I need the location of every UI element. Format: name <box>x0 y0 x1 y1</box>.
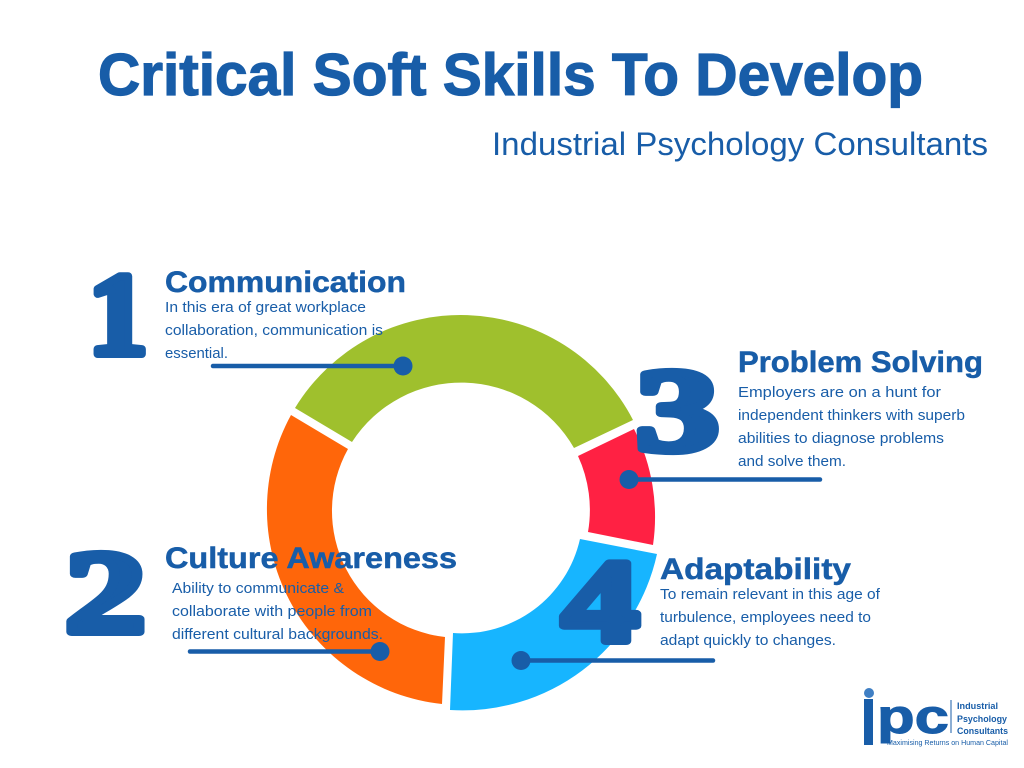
block: communication <box>165 266 406 362</box>
body: culture awareness: collaborate with people from <box>172 604 372 620</box>
pointer: adaptability <box>512 651 713 670</box>
numeral 2: 2 <box>65 527 146 658</box>
body: adaptability <box>660 587 881 649</box>
body: problem solving <box>738 385 965 470</box>
body: problem solving: independent thinkers with superb <box>738 408 965 424</box>
block: adaptability <box>660 553 881 649</box>
subtitle: Industrial Psychology Consultants <box>492 126 988 162</box>
logo name: Psychology <box>957 714 1008 725</box>
logo divider <box>950 700 952 733</box>
logo name: Consultants <box>957 726 1008 737</box>
heading: communication: Communication <box>165 266 406 299</box>
numeral 1: 1 <box>88 249 148 380</box>
segment: blue adaptability <box>450 539 657 710</box>
body: problem solving: and solve them. <box>738 454 846 470</box>
logo stem <box>864 699 873 745</box>
heading: culture awareness: Culture Awareness <box>165 542 457 575</box>
body: problem solving: Employers are on a hunt for <box>738 385 941 401</box>
logo name <box>957 701 1008 737</box>
body: adaptability: turbulence, employees need to <box>660 610 871 626</box>
segment: green communication <box>295 315 633 448</box>
logo: ipc <box>864 688 1008 747</box>
logo tagline: Maximising Returns on Human Capital <box>887 738 1008 747</box>
heading: adaptability: Adaptability <box>660 553 851 586</box>
body: communication: collaboration, communication is <box>165 323 383 339</box>
numeral 3: 3 <box>636 345 719 476</box>
body: culture awareness: Ability to communicate & <box>172 581 344 597</box>
pointer: problem solving <box>620 470 820 489</box>
numeral 4: 4 <box>562 536 639 667</box>
segment: red problem solving <box>578 429 655 545</box>
body: adaptability: To remain relevant in this age of <box>660 587 881 603</box>
body: communication: In this era of great workplace <box>165 300 366 316</box>
title: Critical Soft Skills To Develop <box>98 42 923 108</box>
body: culture awareness <box>172 581 383 643</box>
block: problem solving <box>738 346 983 470</box>
body: culture awareness: different cultural backgrounds. <box>172 627 383 643</box>
body: communication: essential. <box>165 346 228 362</box>
body: problem solving: abilities to diagnose problems <box>738 431 944 447</box>
pointer: communication <box>213 356 412 376</box>
heading: problem solving: Problem Solving <box>738 346 983 379</box>
body: adaptability: adapt quickly to changes. <box>660 633 836 649</box>
body: communication <box>165 300 383 362</box>
logo letters: pc <box>877 691 949 744</box>
logo name: Industrial <box>957 701 998 712</box>
donut chart <box>267 315 657 710</box>
block: culture awareness <box>165 542 457 643</box>
segment: orange culture awareness <box>267 415 445 704</box>
pointer: culture awareness <box>190 642 390 661</box>
logo dot <box>864 688 874 698</box>
